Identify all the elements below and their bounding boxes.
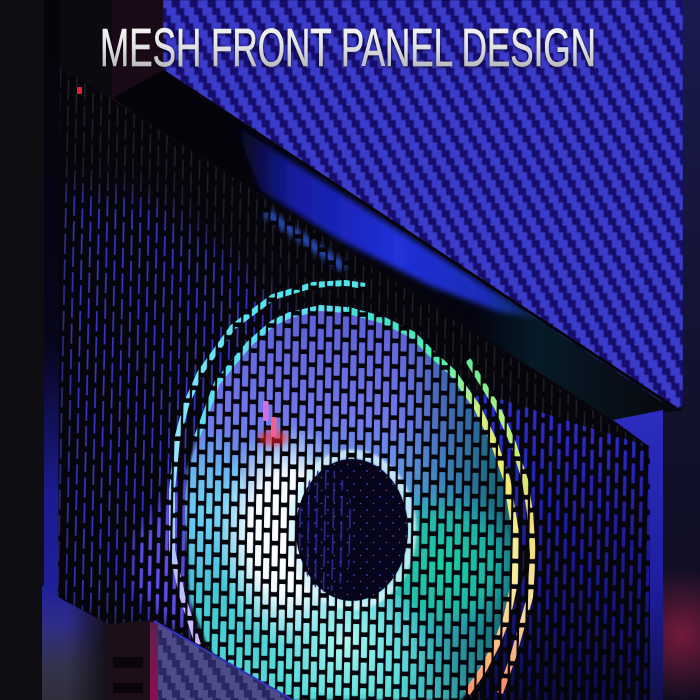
left cyan glow (185, 438, 244, 574)
lower left purple slivers (135, 470, 190, 640)
outer ring right (468, 360, 533, 693)
carbon fibre top panel (163, 0, 683, 410)
upper dark recess left (60, 0, 112, 110)
carbon panel lower edge (163, 71, 677, 409)
mesh front panel (56, 66, 652, 700)
inner ring right (347, 310, 515, 693)
pink reflection lower (271, 417, 277, 437)
blue reflection on bevel (235, 125, 535, 318)
maroon glow bottom right (663, 560, 700, 700)
lower cyan glow (270, 590, 424, 695)
lower carbon panel (154, 621, 293, 700)
pink panel edge (150, 622, 158, 700)
white light bloom (218, 427, 341, 644)
teal blade glow (388, 494, 510, 632)
left pillar (0, 0, 44, 700)
hub halo (292, 454, 412, 606)
dim light above ring (265, 212, 345, 268)
fan hub (296, 459, 408, 601)
dark lower bracket (107, 620, 157, 700)
hub perforation dots (296, 459, 408, 601)
dim right perforations (459, 389, 650, 700)
upper maroon recess (112, 0, 164, 110)
pillar inner edge (44, 0, 60, 620)
lower frame block (42, 585, 113, 700)
outer ring left and top (172, 283, 365, 645)
grey mesh highlights (56, 66, 652, 700)
hub slits (298, 468, 354, 592)
right background strip (663, 0, 700, 700)
dim blue left slits (60, 185, 290, 640)
fan blades (186, 308, 515, 700)
power LED (77, 87, 82, 94)
bracket slots (113, 657, 143, 693)
illuminated fan through perforations (172, 283, 533, 700)
right side frame piece (613, 410, 663, 700)
inner ring left (197, 308, 347, 437)
bevel below carbon panel (113, 70, 683, 420)
red reflection glow (258, 430, 288, 446)
pink reflection upper (263, 401, 269, 421)
